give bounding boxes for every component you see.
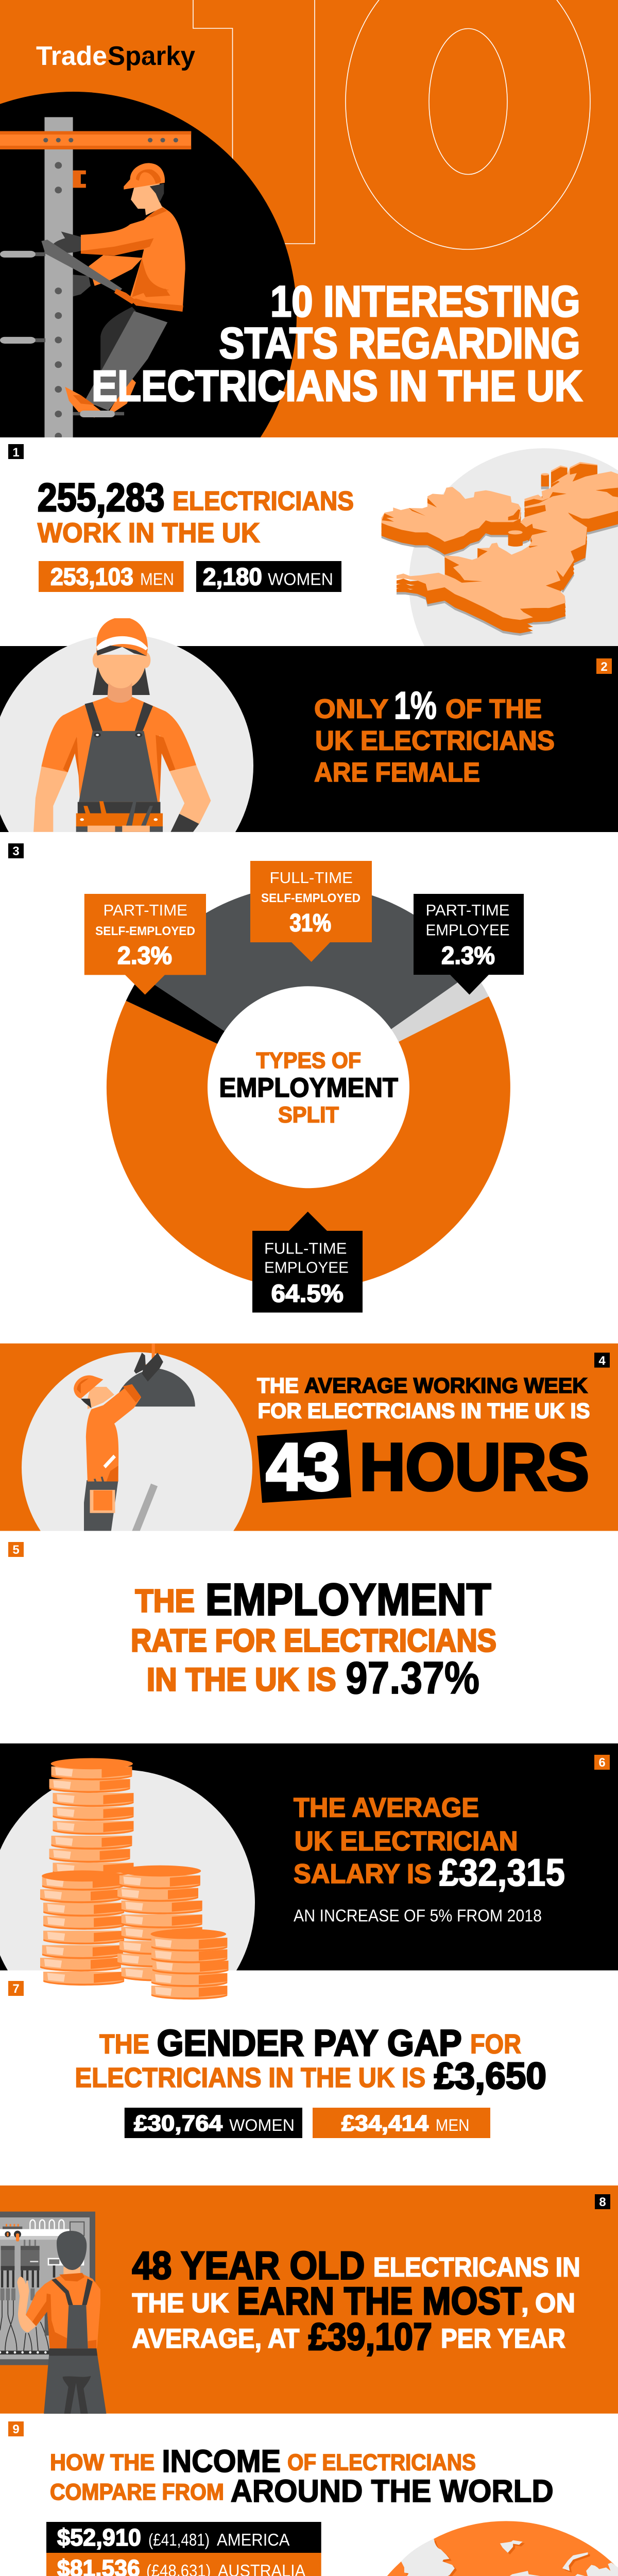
callout: part-time employee: PART-TIME	[425, 901, 510, 919]
donut chart	[107, 885, 510, 1289]
row: America	[46, 2522, 321, 2553]
text: average salary £32,315	[294, 1792, 565, 1925]
badge 3	[8, 843, 24, 858]
text: average salary £32,315: SALARY IS	[294, 1859, 432, 1889]
callout: men pay	[313, 2108, 490, 2138]
icon: grey circle backdrop for map	[409, 448, 618, 646]
text: 48 year old electricians earn the most: 48 YEAR OLD	[132, 2244, 365, 2287]
text: only 1% of the UK electricians are female: ARE FEMALE	[314, 757, 480, 788]
illustration: female electrician	[33, 617, 211, 832]
badge 4: 4	[598, 1354, 606, 1368]
row: America: AMERICA	[217, 2530, 289, 2549]
text: average salary £32,315: AN INCREASE OF 5% FROM 2018	[294, 1906, 542, 1925]
heading: gender pay gap: GENDER PAY GAP	[157, 2023, 462, 2064]
heading: 255,283 electricians work in the UK: 255,283	[38, 476, 165, 520]
badge 4	[594, 1353, 610, 1368]
badge 9: 9	[12, 2422, 20, 2436]
text: 48 year old electricians earn the most	[132, 2244, 580, 2358]
panel: stat 2 female electricians	[0, 618, 618, 832]
panel: stat 9 income around the world	[8, 2421, 618, 2576]
heading: gender pay gap	[75, 2023, 546, 2097]
text: 48 year old electricians earn the most: ELECTRICANS IN	[373, 2252, 580, 2282]
grey circle backdrop	[22, 1352, 252, 1531]
callout: full-time employee: EMPLOYEE	[264, 1259, 349, 1277]
heading: 255,283 electricians work in the UK: ELECTRICIANS	[173, 486, 354, 516]
heading: 255,283 electricians work in the UK	[38, 476, 354, 548]
heading: income around the world	[50, 2444, 554, 2509]
badge 3: 3	[12, 844, 20, 858]
callout: part-time self-employed: 2.3%	[117, 942, 172, 970]
logo: TradeSparky: Trade	[36, 41, 107, 71]
row: America: $52,910	[57, 2524, 141, 2551]
text: average salary £32,315: THE AVERAGE	[294, 1792, 479, 1823]
heading: average working week: AVERAGE WORKING WEEK	[304, 1374, 588, 1398]
text: 48 year old electricians earn the most: £39,107	[308, 2315, 432, 2358]
badge 6	[594, 1755, 610, 1770]
callout: women pay	[125, 2108, 302, 2138]
heading: gender pay gap: FOR	[470, 2029, 521, 2059]
callout: part-time self-employed: PART-TIME	[103, 901, 187, 919]
callout: part-time employee: EMPLOYEE	[425, 921, 510, 939]
text: 48 year old electricians earn the most: ON	[535, 2288, 575, 2318]
badge 5: 5	[12, 1543, 20, 1557]
donut centre label: EMPLOYMENT	[219, 1073, 398, 1103]
text: only 1% of the UK electricians are female: 1%	[394, 684, 437, 727]
heading: income around the world: COMPARE FROM	[50, 2480, 224, 2505]
panel: stat 4 average working week	[0, 1344, 618, 1531]
text: 48 year old electricians earn the most: EARN THE MOST	[237, 2279, 522, 2323]
panel: stat 7 gender pay gap	[8, 1981, 546, 2138]
big outlined number 10	[193, 0, 590, 249]
grey circle backdrop	[0, 1770, 255, 1970]
text: employment rate 97.37%: EMPLOYMENT	[205, 1575, 491, 1625]
title	[92, 277, 582, 410]
panel: stat 5 employment rate	[8, 1542, 496, 1703]
callout: part-time employee	[414, 894, 524, 995]
callout: women count: 2,180	[203, 563, 262, 590]
text: 48 year old electricians earn the most: PER YEAR	[441, 2324, 565, 2354]
text: average salary £32,315: UK ELECTRICIAN	[295, 1826, 518, 1856]
callout: women count	[196, 561, 341, 592]
callout: full-time self-employed: SELF-EMPLOYED	[261, 891, 360, 905]
badge 1	[8, 444, 24, 460]
callout: full-time employee: FULL-TIME	[264, 1240, 347, 1258]
panel: stat 3 types of employment split	[8, 843, 524, 1313]
text: employment rate 97.37%: 97.37%	[346, 1652, 479, 1703]
callout: part-time self-employed	[84, 894, 206, 995]
text: only 1% of the UK electricians are female	[314, 684, 555, 788]
globe land shadows	[352, 2540, 590, 2576]
callout: men count: MEN	[140, 570, 174, 589]
callout: men pay: £34,414	[341, 2111, 429, 2136]
callout: men pay: MEN	[436, 2116, 470, 2134]
badge 8: 8	[599, 2195, 606, 2209]
callout: full-time self-employed	[250, 861, 372, 962]
badge 7: 7	[12, 1982, 20, 1996]
illustration: 3D map of the UK	[382, 462, 618, 636]
donut centre label	[219, 1048, 398, 1127]
callout: women count: WOMEN	[268, 570, 333, 589]
icon: coin stacks	[40, 1758, 229, 1999]
badge 7	[8, 1981, 24, 1996]
callout: full-time employee	[252, 1212, 363, 1313]
panel: stat 8 48 year old electricians	[0, 2185, 618, 2415]
badge 6: 6	[598, 1756, 606, 1770]
text: 48 year old electricians earn the most: AVERAGE, AT	[132, 2324, 299, 2354]
heading: average working week: FOR ELECTRCIANS IN THE UK IS	[258, 1398, 590, 1423]
black circle backdrop	[0, 92, 297, 437]
badge 2: 2	[600, 660, 608, 674]
badge 2	[596, 658, 612, 674]
grey circle backdrop	[0, 637, 253, 832]
text: only 1% of the UK electricians are female: ONLY	[314, 694, 388, 724]
badge 8	[595, 2194, 610, 2209]
callout: full-time employee: 64.5%	[271, 1280, 344, 1308]
callout: men count	[39, 561, 184, 592]
heading: gender pay gap: THE	[99, 2029, 149, 2059]
icon: globe	[387, 2521, 618, 2576]
illustration: electrician climbing a pole	[0, 117, 191, 439]
logo: TradeSparky: Sparky	[108, 41, 195, 71]
panel: header	[0, 0, 618, 437]
text: 48 year old electricians earn the most: THE UK	[132, 2288, 229, 2318]
title: 10 INTERESTING	[270, 277, 580, 326]
row: Australia	[46, 2553, 321, 2576]
heading: average working week: THE	[257, 1374, 299, 1398]
badge 9	[8, 2421, 24, 2436]
heading: 255,283 electricians work in the UK: WORK IN THE UK	[38, 517, 260, 548]
donut centre label: TYPES OF	[256, 1048, 361, 1073]
text: employment rate 97.37%: IN THE UK IS	[147, 1662, 336, 1698]
callout: women pay: WOMEN	[229, 2116, 295, 2134]
callout: women pay: £30,764	[134, 2111, 223, 2136]
heading: income around the world: INCOME	[162, 2444, 281, 2479]
text: 48 year old electricians earn the most: ,	[521, 2288, 529, 2318]
callout: 43 hours: 43	[266, 1429, 340, 1504]
heading: gender pay gap: £3,650	[434, 2056, 546, 2097]
callout: full-time self-employed: 31%	[289, 910, 331, 937]
illustration: electrician fitting a lamp	[74, 1344, 195, 1531]
panel: stat 1 electricians in the UK	[8, 444, 618, 646]
illustration: electrician at switchboard	[0, 2212, 107, 2415]
callout: part-time self-employed: SELF-EMPLOYED	[95, 924, 195, 938]
text: only 1% of the UK electricians are female: OF THE	[445, 694, 542, 724]
text: employment rate 97.37%	[131, 1575, 496, 1703]
row: America: (£41,481)	[148, 2530, 210, 2549]
callout: full-time self-employed: FULL-TIME	[270, 869, 353, 887]
text: employment rate 97.37%: THE	[135, 1584, 195, 1619]
text: only 1% of the UK electricians are female: UK ELECTRICIANS	[315, 726, 555, 756]
heading: income around the world: HOW THE	[50, 2450, 154, 2475]
callout: part-time employee: 2.3%	[441, 942, 495, 970]
donut centre label: SPLIT	[278, 1103, 339, 1127]
callout: men count: 253,103	[50, 563, 133, 590]
heading: income around the world: OF ELECTRICIANS	[287, 2450, 476, 2475]
callout: 43 hours	[257, 1429, 589, 1504]
badge 5	[8, 1542, 24, 1557]
text: average salary £32,315: £32,315	[439, 1851, 565, 1894]
callout: 43 hours: HOURS	[359, 1429, 589, 1504]
panel: stat 6 average salary	[0, 1743, 618, 2000]
table: income by country	[46, 2522, 321, 2576]
text: employment rate 97.37%: RATE FOR ELECTRICIANS	[131, 1623, 496, 1659]
heading: average working week	[257, 1374, 590, 1423]
badge 1: 1	[12, 446, 20, 460]
heading: income around the world: AROUND THE WORLD	[231, 2473, 554, 2509]
logo: TradeSparky	[36, 41, 195, 71]
heading: gender pay gap: ELECTRICIANS IN THE UK IS	[75, 2062, 425, 2093]
